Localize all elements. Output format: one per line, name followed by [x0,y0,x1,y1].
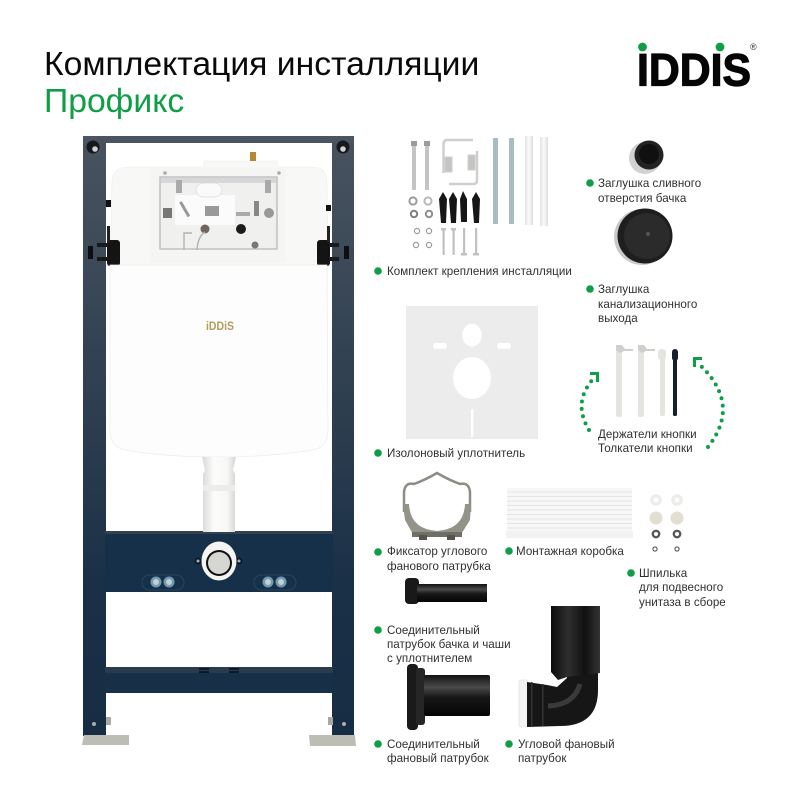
label: mounting box: Монтажная коробка [516,545,624,558]
part: button holders and pushers [616,345,678,417]
side clips [97,200,339,266]
drain pipe [202,457,236,532]
arrow: left dotted [582,372,599,430]
cistern lower panel with logo: iDDiS [206,321,234,333]
brackets [444,140,477,184]
label: toilet studs: унитаза в сборе [639,596,726,609]
label: tank outlet plug: отверстия бачка [598,192,687,205]
label: sewer outlet plug: канализационного [598,298,697,311]
label dot and text: mounting kit: Комплект крепления инсталляции [387,265,572,278]
label: sewer outlet plug: Заглушка [598,283,650,296]
label: pipe clamp: Фиксатор углового [387,545,487,558]
label: pipe clamp: фанового патрубка [387,560,491,573]
mounting slots with studs [142,575,296,590]
outlet with bolts [194,542,242,580]
frame: steel posts and crossbars [83,136,354,736]
label: toilet studs: Шпилька [639,567,688,580]
label: tank outlet plug: Заглушка сливного [598,177,701,190]
label: straight sewer connector [374,738,490,765]
bolts [411,141,430,190]
cistern lower panel with logo [110,265,328,457]
threaded rods [493,138,514,224]
part: toilet studs set [650,494,684,551]
part: cistern-to-bowl connecting pipe [405,578,487,604]
part: tank outlet plug [629,140,664,174]
part: straight sewer connector [407,664,490,730]
label: cistern-to-bowl pipe: с уплотнителем [387,652,472,665]
part: isolon gasket sheet [406,306,538,439]
label: sewer outlet plug: выхода [598,312,638,325]
label: sewer outlet plug [586,283,697,325]
clear tubes [525,136,548,226]
label: cistern-to-bowl pipe: Соединительный [387,624,480,637]
part: angled sewer elbow [519,606,600,727]
black anchors [439,191,480,223]
label: cistern-to-bowl pipe: патрубок бачка и чаши [387,638,511,651]
label: angled sewer elbow [505,738,615,765]
silver screws [441,228,479,256]
parts: mounting kit [409,136,548,256]
label: pipe clamp [374,545,491,573]
arrow: right dotted [693,357,723,447]
label: holders and pushers: Толкатели кнопки [598,442,693,455]
label: holders and pushers: Держатели кнопки [598,428,697,441]
cistern upper body [110,152,328,268]
frame feet [82,717,356,746]
label: toilet studs: для подвесного [639,581,723,594]
label: isolon gasket: Изолоновый уплотнитель [387,447,525,460]
part: sewer outlet plug [614,208,672,265]
logo: IDDIS: ® [750,42,757,52]
title: Комплектация инсталляции [44,45,479,83]
part: mounting box [506,488,633,538]
washers [409,197,432,248]
label: tank outlet plug [586,177,701,205]
label: angled sewer elbow: патрубок [518,752,567,765]
label: straight sewer connector: фановый патрубок [387,752,490,765]
label: straight sewer connector: Соединительный [387,738,480,751]
logo: IDDIS: IDDIS [637,44,751,96]
title: Профикс [44,82,184,120]
label: cistern-to-bowl pipe [374,624,511,665]
label: holders and pushers [598,428,697,455]
label: toilet studs [627,567,726,609]
part: angled pipe clamp [403,473,471,540]
title [44,45,479,120]
label: angled sewer elbow: Угловой фановый [518,738,615,751]
installation frame with cistern [82,136,356,746]
